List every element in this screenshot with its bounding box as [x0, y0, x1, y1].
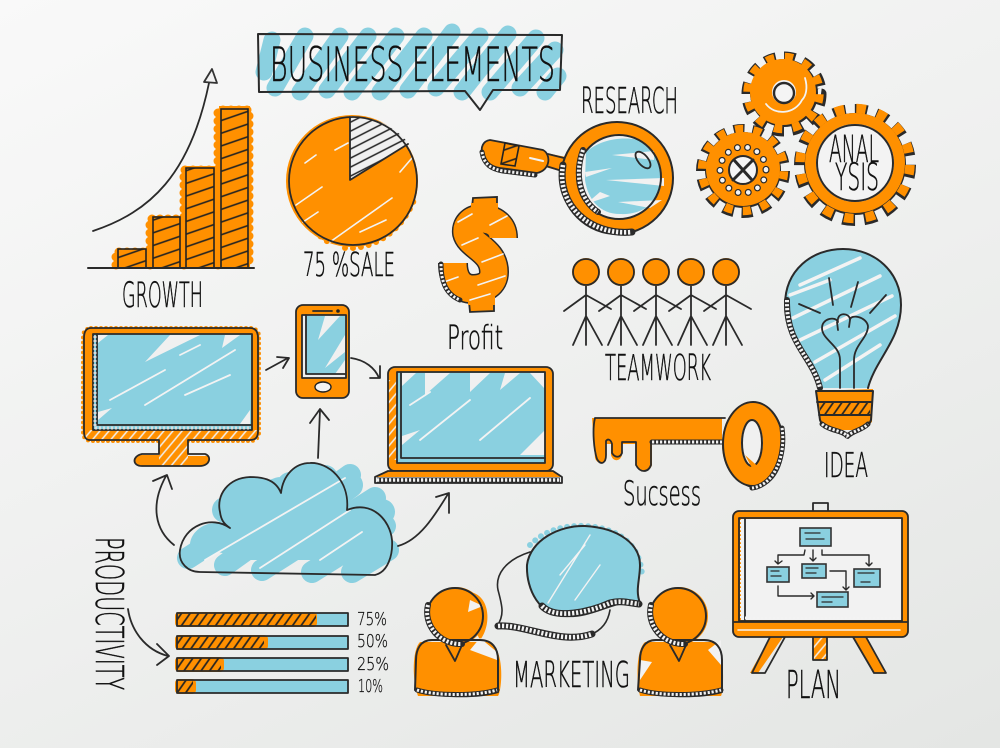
gears analysis	[702, 57, 910, 220]
gear: top	[747, 57, 821, 131]
cloud	[180, 463, 392, 575]
title text: BUSINESS ELEMENTS	[270, 38, 555, 93]
success label: Sucsess	[623, 474, 701, 514]
arrows between devices	[153, 357, 449, 546]
person right	[637, 587, 723, 696]
growth label: GROWTH	[122, 276, 203, 316]
bar 25	[175, 654, 389, 675]
teamwork figures	[564, 258, 751, 389]
magnifier	[482, 81, 678, 234]
speech bubbles	[497, 526, 642, 638]
plan board	[733, 503, 908, 707]
gear: left	[702, 129, 784, 212]
flowchart	[767, 528, 880, 607]
productivity bars	[175, 609, 389, 697]
icon: dollar	[441, 197, 507, 357]
gear: right	[800, 108, 910, 220]
bar 75	[175, 609, 387, 630]
pie chart	[286, 115, 418, 284]
bar 50: 50%	[357, 631, 388, 652]
person left	[414, 587, 501, 696]
light bulb	[785, 249, 901, 486]
back bubble	[497, 552, 610, 638]
idea label: IDEA	[824, 446, 868, 486]
title banner	[258, 32, 562, 110]
growth chart	[88, 69, 254, 316]
plan label: PLAN	[786, 663, 841, 707]
growth curve arrow	[93, 69, 217, 231]
phone	[296, 305, 349, 398]
research label: RESEARCH	[581, 81, 678, 122]
front bubble	[530, 526, 642, 575]
marketing label: MARKETING	[513, 655, 630, 696]
bar 25: 25%	[357, 654, 389, 675]
key	[592, 402, 784, 514]
gear: right: YSIS	[835, 156, 879, 199]
bar 10: 10%	[358, 676, 383, 697]
monitor	[83, 328, 259, 466]
teamwork figures: TEAMWORK	[605, 348, 711, 389]
profit label: Profit	[447, 318, 503, 357]
analysis label: ANAL	[829, 128, 879, 171]
bar 50	[175, 631, 388, 652]
easel legs	[750, 637, 886, 673]
laptop	[375, 367, 562, 483]
bar 10	[175, 676, 383, 697]
bar 75: 75%	[357, 609, 387, 630]
arrow to bars	[128, 609, 169, 665]
sale label: 75 %SALE	[303, 245, 395, 284]
